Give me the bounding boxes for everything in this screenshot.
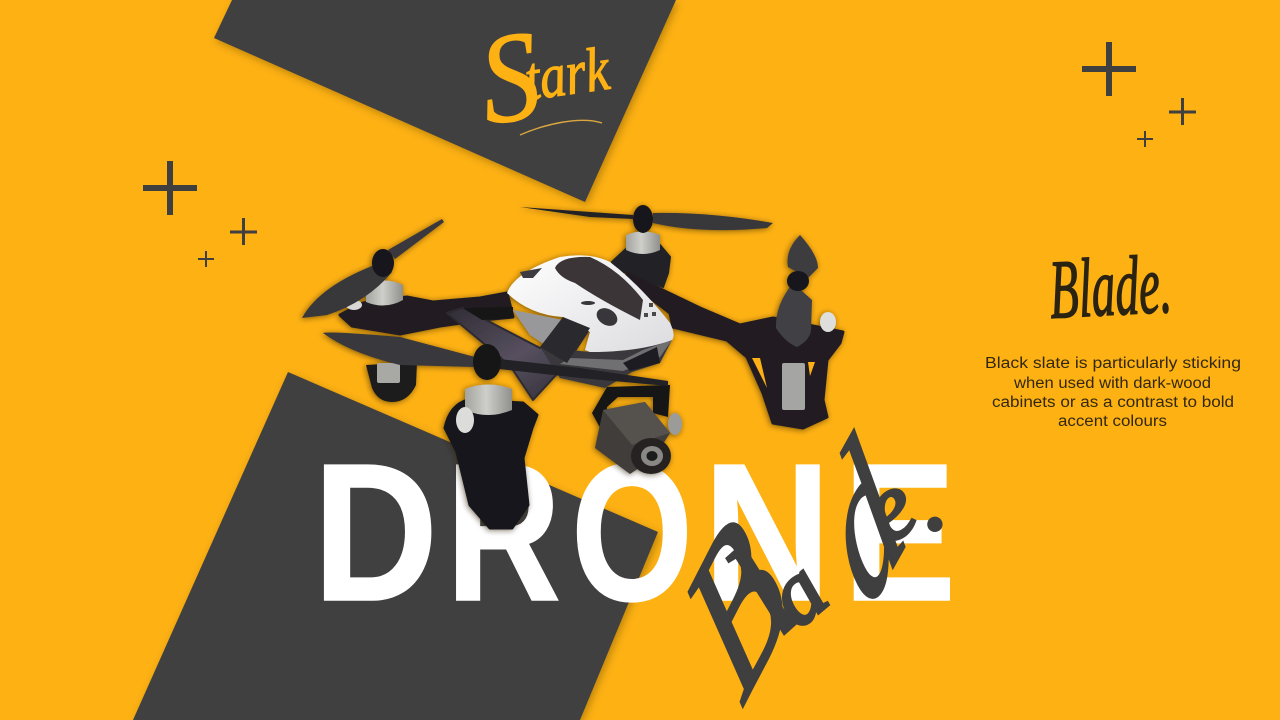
script accent: big Blade: l	[699, 524, 827, 660]
description text block: when used with dark-wood	[1013, 375, 1211, 392]
drone underbody	[540, 340, 672, 388]
heading: Blade: Blade.	[1047, 238, 1174, 337]
title: DRONE: O	[571, 423, 693, 642]
title: DRONE: E	[843, 423, 956, 642]
drone illustration	[302, 205, 843, 528]
script accent: big Blade: a	[747, 541, 845, 645]
description text block: accent colours	[1058, 413, 1167, 430]
top dark panel	[214, 0, 676, 202]
description text block: cabinets or as a contrast to bold	[992, 394, 1234, 411]
camera cube	[595, 402, 682, 474]
front-left blade	[323, 332, 475, 367]
back-left landing leg	[366, 362, 417, 402]
right motor blades	[776, 235, 836, 347]
title: DRONE: R	[446, 423, 561, 642]
plus icons: left cluster	[143, 161, 257, 267]
title: DRONE: N	[703, 423, 831, 642]
script accent: big Blade: d	[735, 433, 943, 646]
heading: Stark: S	[471, 3, 548, 152]
back-left motor and blades	[302, 219, 444, 318]
front motor and leg	[445, 344, 668, 528]
camera gimbal	[592, 385, 670, 433]
description text block: Black slate is particularly sticking	[985, 355, 1241, 372]
description text block	[985, 355, 1241, 430]
frame opening	[463, 307, 513, 320]
cross frame	[447, 308, 590, 400]
right arm and landing leg	[627, 273, 843, 428]
back-left arm and pod	[340, 293, 513, 334]
plus icons: right cluster	[1082, 42, 1196, 147]
bottom dark panel	[133, 372, 658, 720]
back-right motor	[520, 205, 773, 287]
title: DRONE: D	[313, 423, 438, 642]
heading: Stark	[471, 0, 619, 152]
script accent: big Blade: e	[844, 450, 933, 563]
heading: Stark: tark	[521, 35, 614, 114]
drone body shell	[507, 255, 674, 371]
script accent: big Blade: .	[897, 440, 958, 553]
